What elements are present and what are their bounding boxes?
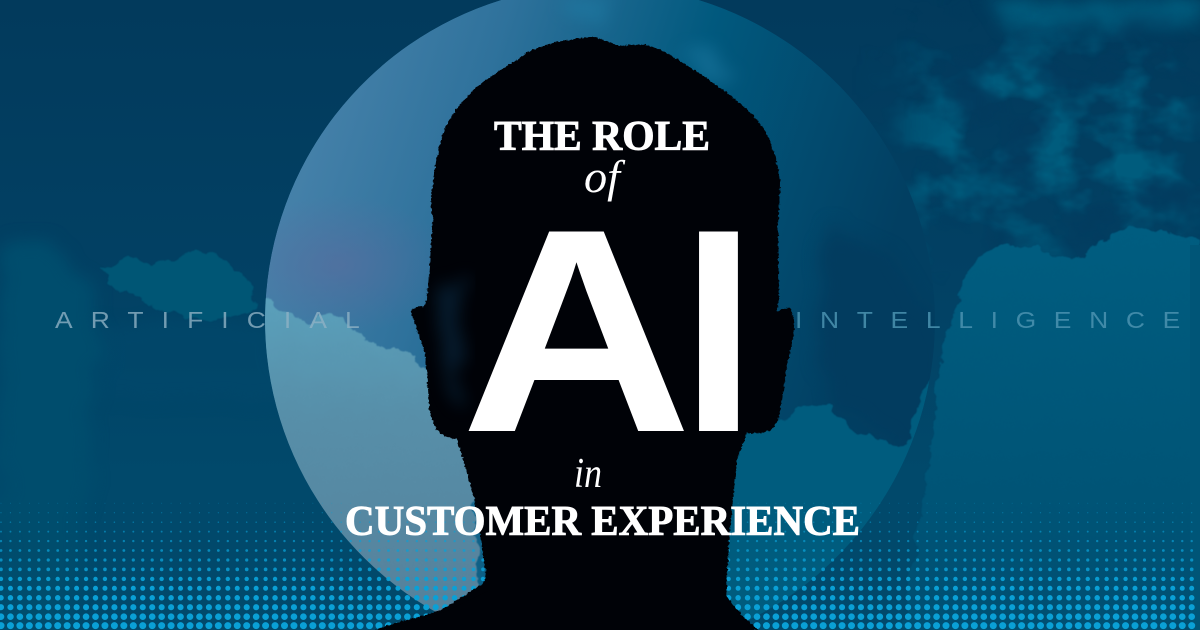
halftone dot band [1, 503, 1200, 626]
word: in: in [574, 451, 602, 497]
word: INTELLIGENCE: INTELLIGENCE [795, 309, 1180, 334]
silhouette: head and shoulders [375, 37, 794, 630]
letter: I: I [681, 169, 756, 493]
title block [345, 114, 860, 545]
cloud: teal cloud lower right in disc [726, 380, 930, 620]
cloud: top wisps in disc [560, 0, 730, 77]
letter: A: A [461, 168, 692, 493]
silhouette: faint side highlights [436, 270, 464, 410]
silhouette: base fill at frame edge [385, 590, 752, 630]
word: of: of [584, 151, 626, 202]
clouds: right background [900, 0, 1200, 630]
cloud: dark shadow right in disc [826, 242, 849, 278]
circle: pale disc behind head [230, 0, 960, 630]
heading: CUSTOMER EXPERIENCE: CUSTOMER EXPERIENCE [345, 499, 860, 545]
clouds: left background [0, 243, 290, 630]
word: ARTIFICIAL: ARTIFICIAL [55, 309, 360, 334]
cloud: pale cloud lower left in disc [265, 298, 481, 612]
heading: THE ROLE: THE ROLE [494, 114, 710, 160]
